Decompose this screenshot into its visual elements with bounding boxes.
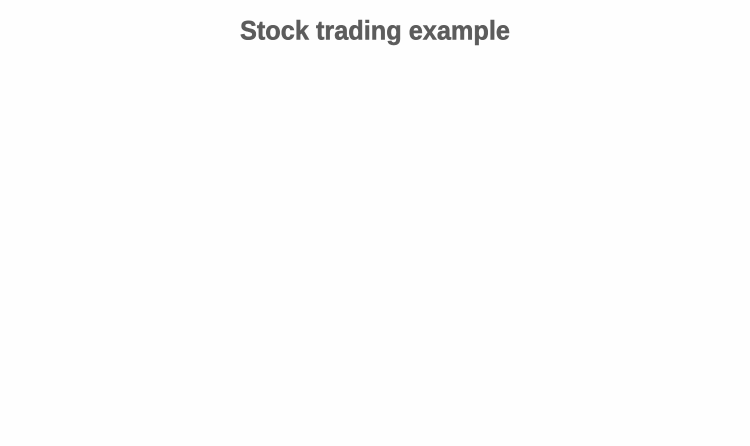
title: Stock trading example xyxy=(240,16,510,46)
